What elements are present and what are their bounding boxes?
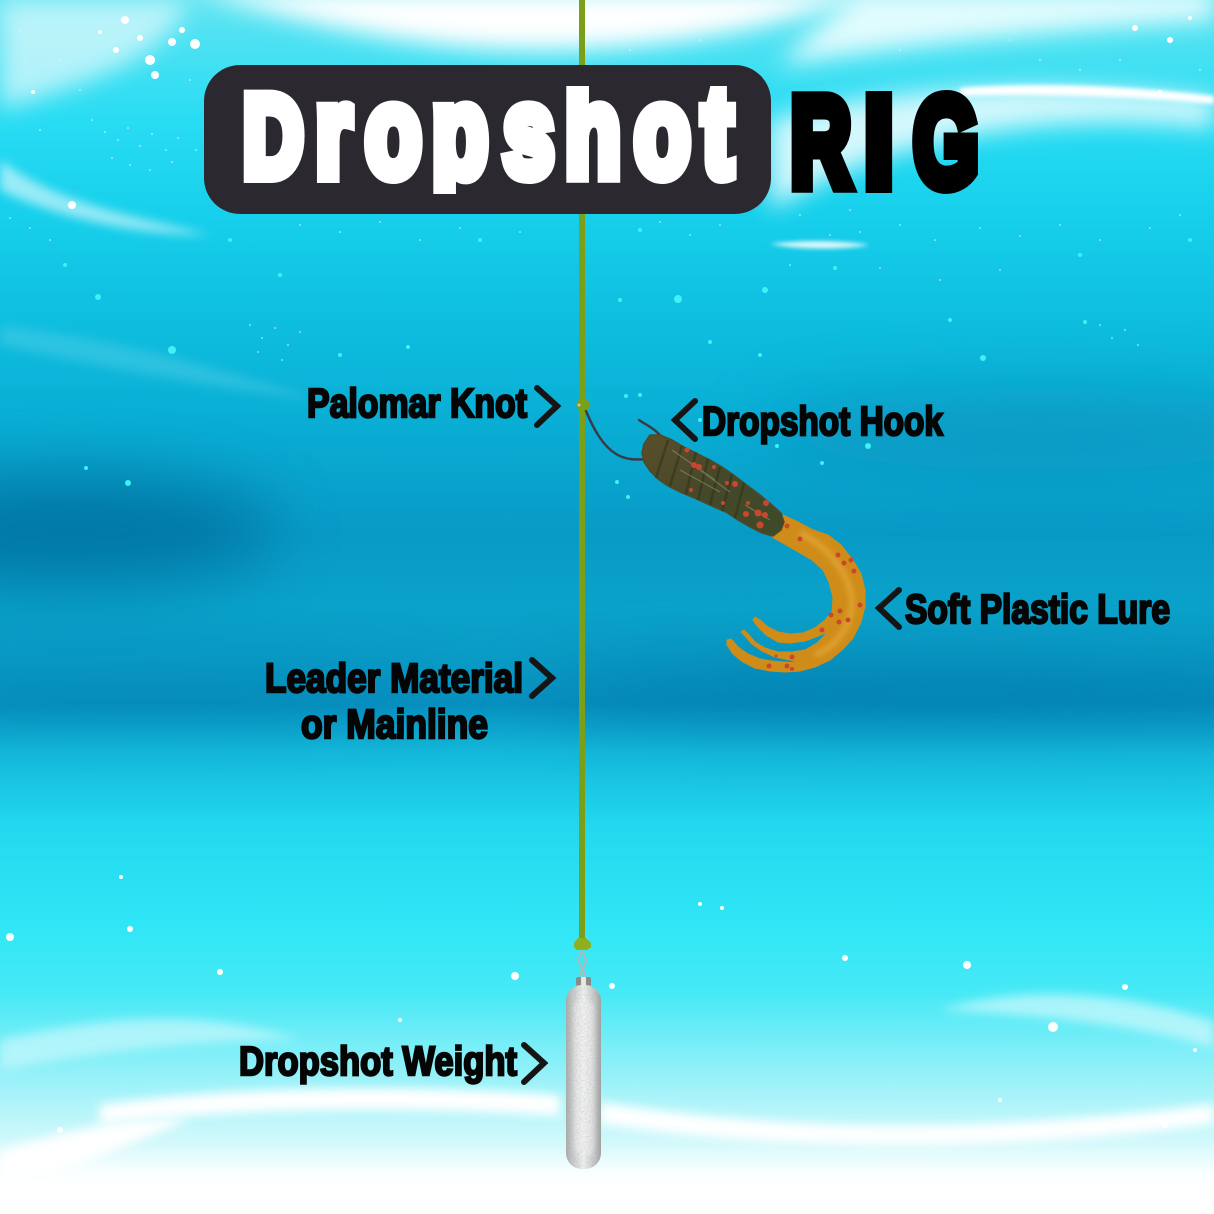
arrow: to line xyxy=(532,660,552,696)
lure glitter flakes xyxy=(684,448,862,671)
soft plastic lure xyxy=(642,435,865,672)
arrow: to hook xyxy=(675,401,695,439)
swivel xyxy=(579,951,586,977)
weight texture xyxy=(566,985,601,1169)
tiny sparkles xyxy=(10,30,1200,360)
arrow: to weight xyxy=(524,1045,544,1082)
title: RIG: G xyxy=(913,72,979,213)
lure body xyxy=(642,435,784,536)
fishing line xyxy=(579,0,585,942)
weight body xyxy=(566,985,601,1169)
lure tail xyxy=(727,515,865,672)
arrow: to knot xyxy=(537,388,557,425)
label: Leader Material or Mainline: Leader Material xyxy=(265,655,523,701)
dropshot hook xyxy=(586,411,662,459)
label: Leader Material or Mainline: or Mainline xyxy=(301,701,488,747)
arrow: to lure xyxy=(879,590,899,627)
palomar knot xyxy=(576,398,590,412)
label: Dropshot Weight: Dropshot Weight xyxy=(239,1038,517,1084)
label: Dropshot Hook: Dropshot Hook xyxy=(702,398,943,444)
label: Palomar Knot: Palomar Knot xyxy=(307,380,527,426)
label: Leader Material or Mainline xyxy=(265,655,552,747)
dropshot weight with swivel xyxy=(566,938,601,1169)
cap xyxy=(576,977,591,986)
green bead xyxy=(574,938,591,950)
title: RIG: R xyxy=(791,72,851,213)
title: RIG: I xyxy=(869,79,889,206)
title: Dropshot badge: Dropshot xyxy=(243,62,733,204)
